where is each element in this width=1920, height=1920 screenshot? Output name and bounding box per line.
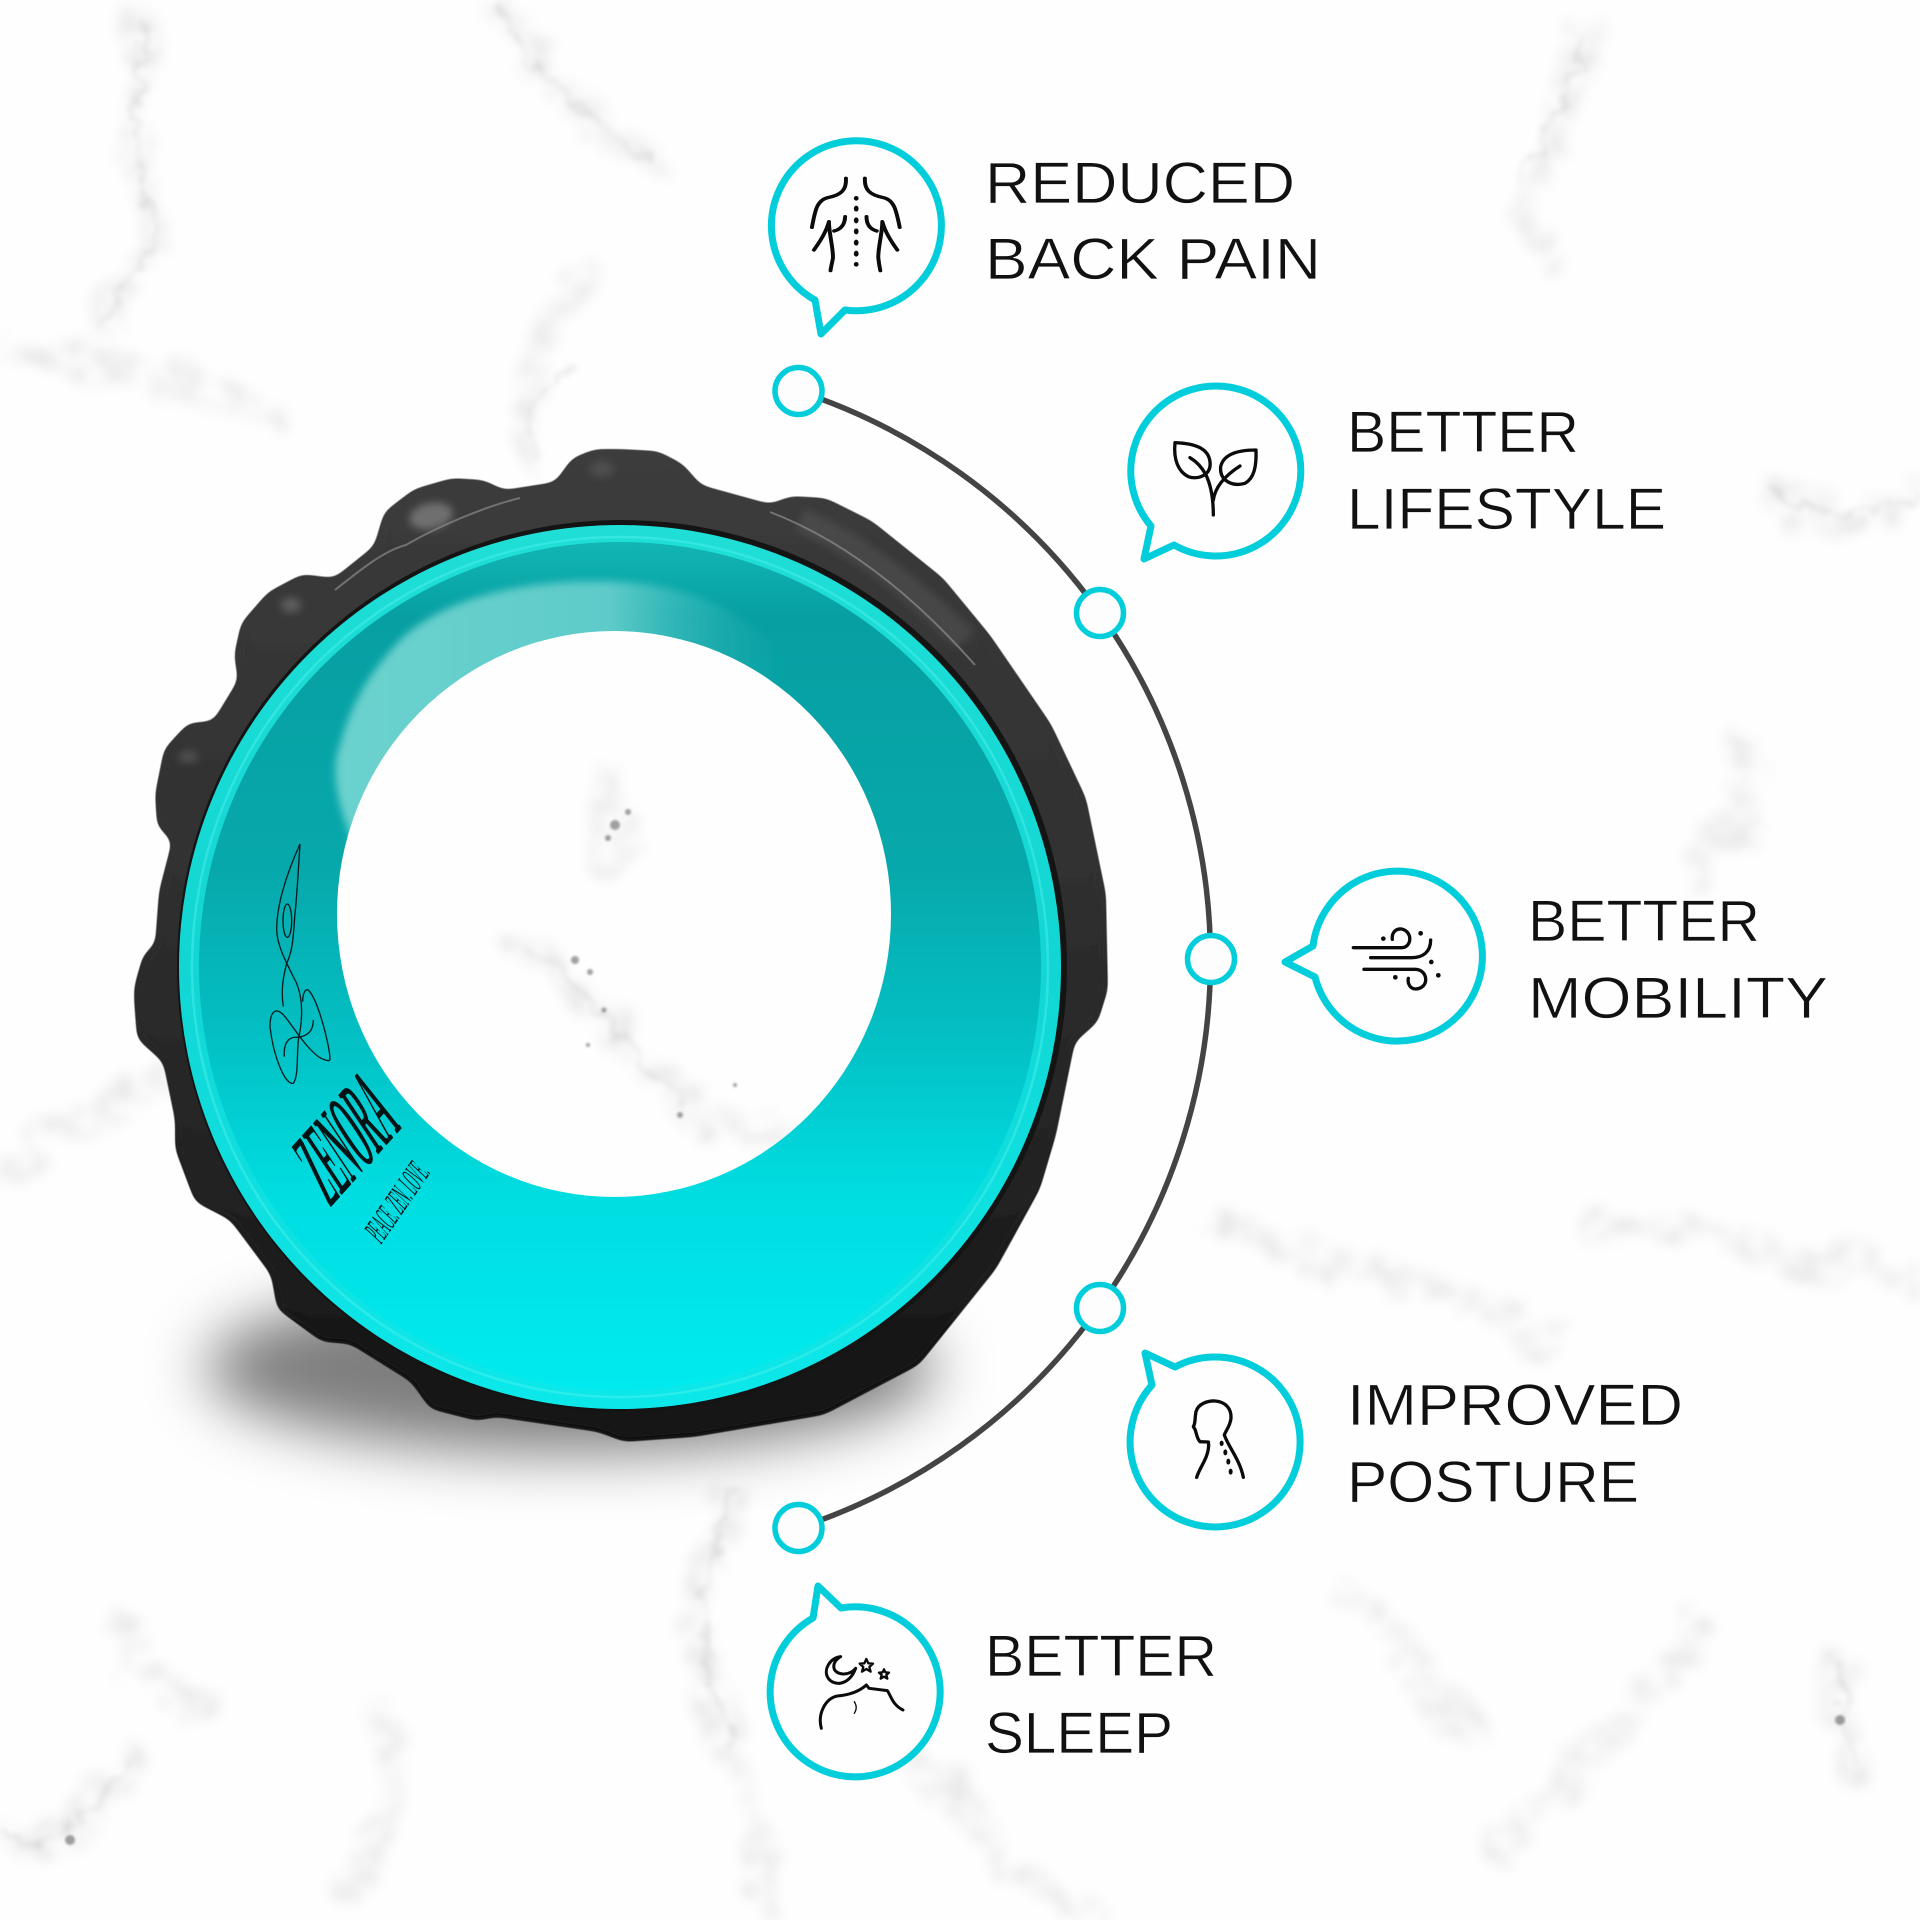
brand mark and wordmark <box>270 844 437 1251</box>
rim highlight line <box>192 537 1048 1397</box>
benefit: improved posture <box>1130 1353 1683 1527</box>
label: BACK PAIN <box>985 227 1321 292</box>
label: BETTER <box>1528 889 1760 954</box>
connector arc <box>798 391 1210 1528</box>
label: POSTURE <box>1347 1450 1639 1515</box>
benefit: reduced back pain <box>771 141 1321 334</box>
label: LIFESTYLE <box>1347 477 1666 542</box>
icon: head and spine <box>1193 1401 1243 1477</box>
benefit: better lifestyle <box>1131 386 1666 559</box>
bright teal outer lip <box>179 525 1061 1409</box>
speech bubble <box>1130 1353 1300 1527</box>
speech bubble <box>1131 386 1301 559</box>
speech bubble <box>770 1586 940 1777</box>
label: IMPROVED <box>1347 1373 1683 1438</box>
connector nodes <box>775 368 1234 1552</box>
label: BETTER <box>985 1624 1217 1689</box>
product: Zenora wheel <box>134 449 1108 1453</box>
icon: wind <box>1353 929 1441 989</box>
speech bubble <box>1285 871 1482 1041</box>
label: REDUCED <box>985 151 1295 216</box>
ground shadow <box>205 1283 935 1453</box>
benefit: better mobility <box>1285 871 1828 1041</box>
black textured tyre with bumps <box>134 449 1108 1442</box>
benefit: better sleep <box>770 1586 1217 1777</box>
label: MOBILITY <box>1528 966 1828 1031</box>
teal inner face <box>199 542 1041 1390</box>
wordmark: ZENORA: ZENORA <box>276 1048 416 1229</box>
label: BETTER <box>1347 400 1579 465</box>
speech bubble <box>771 141 941 334</box>
tyre texture highlights <box>178 461 975 763</box>
lighter inner wall <box>336 581 790 840</box>
label: SLEEP <box>985 1701 1173 1766</box>
tagline: PEACE. ZEN. LOVE. <box>358 1151 437 1251</box>
icon: back muscles <box>812 178 900 271</box>
icon: moon, stars and sleeper <box>820 1657 903 1728</box>
icon: sprout <box>1175 443 1256 515</box>
lotus line logo <box>270 844 330 1083</box>
dark seam <box>177 520 1067 1318</box>
